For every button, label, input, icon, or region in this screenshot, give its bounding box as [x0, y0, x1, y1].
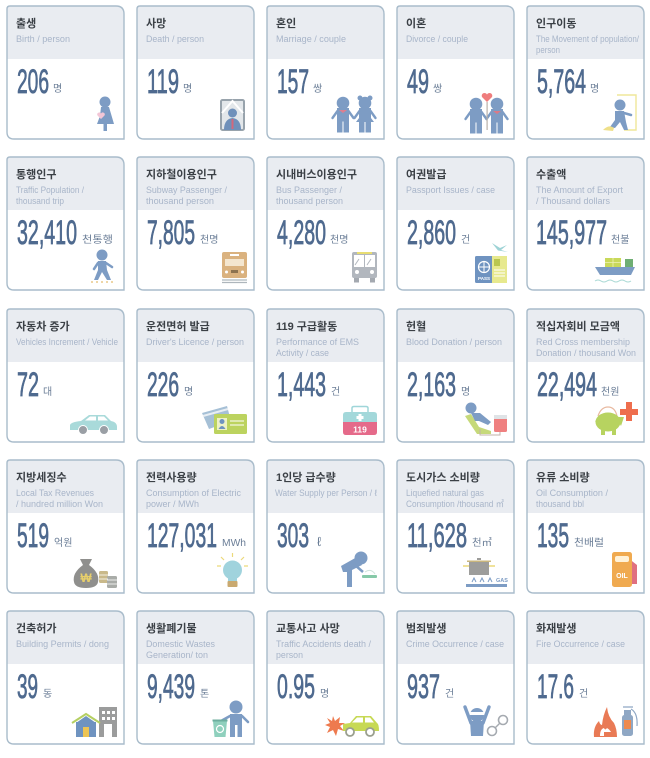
value: 1,443: 건 [331, 386, 340, 398]
heading: population movement [536, 17, 639, 55]
card: bus passenger [267, 157, 384, 290]
icon: donor in chair with blood bag [465, 402, 507, 435]
heading: 119 EMS activity: 119 구급활동 [276, 319, 337, 333]
icon: house and building [72, 707, 117, 737]
icon: passport and plane: PASS [478, 276, 490, 281]
card: traffic population [7, 157, 124, 290]
heading: traffic accidents death: 교통사고 사망 [276, 622, 340, 635]
icon: person running through door [603, 95, 636, 131]
value: 226: 226 [147, 366, 179, 404]
heading: oil consumption [536, 471, 609, 509]
icon: pregnant woman [97, 96, 114, 131]
value: 11,628: 11,628 [407, 517, 467, 555]
icon: subway train [222, 252, 247, 282]
heading: traffic accidents death: Traffic Accidents death / [276, 639, 371, 649]
heading: driver's licence: 운전면허 발급 [146, 320, 210, 333]
heading: consumption of electric power: 전력사용량 [146, 471, 197, 484]
card: electric power [137, 460, 254, 593]
heading: consumption of electric power: power / MWh [146, 499, 199, 509]
card: driver's licence [137, 309, 254, 442]
heading: local tax revenues: Local Tax Revenues [16, 488, 94, 498]
icon: car [70, 415, 117, 434]
heading: subway passenger: 지하철이용인구 [146, 168, 217, 181]
heading: oil consumption: 유류 소비량 [536, 471, 590, 484]
heading: fire occurrence [536, 621, 625, 649]
heading: marriage: 혼인 [276, 17, 296, 30]
icon: car crash [325, 716, 379, 736]
heading: 119 EMS activity: Performance of EMS [276, 337, 359, 347]
icon: couple [332, 96, 376, 132]
heading: red cross membership [536, 319, 636, 358]
value: 72: 대 [43, 386, 52, 398]
icon: walking person [91, 250, 115, 282]
value: 226: 명 [184, 386, 193, 398]
heading: population movement: 인구이동 [536, 17, 576, 30]
heading: traffic population: 통행인구 [16, 167, 56, 181]
card: red cross donation [527, 309, 644, 442]
card: death [137, 6, 254, 139]
heading: local tax revenues [16, 471, 103, 509]
heading: water supply per person: Water Supply per Person / ℓ [275, 488, 378, 498]
heading: oil consumption: Oil Consumption / [536, 488, 609, 498]
value: 2,163: 2,163 [407, 366, 456, 404]
icon: money bag and coins: ₩ [80, 571, 92, 585]
value: 49: 49 [407, 63, 429, 101]
value: 127,031: MWh [222, 538, 246, 549]
heading: liquefied natural gas: Consumption /thousand ㎥ [406, 499, 504, 509]
heading: population movement: person [536, 45, 560, 55]
heading: bus passenger [276, 167, 357, 206]
card: movement of population [527, 6, 644, 139]
value: 157: 쌍 [313, 83, 322, 95]
value: 39: 동 [43, 688, 52, 700]
heading: birth: Birth / person [16, 34, 70, 44]
heading: divorce: Divorce / couple [406, 34, 468, 44]
card: vehicles increment [7, 309, 124, 442]
value: 22,494: 천원 [601, 386, 619, 398]
value: 2,163: 명 [461, 386, 470, 398]
value: 2,860: 건 [461, 234, 470, 246]
heading: death: 사망 [146, 17, 166, 30]
heading: building permits [16, 621, 109, 649]
value: 22,494: 22,494 [537, 366, 597, 404]
heading: death: Death / person [146, 34, 204, 44]
value: 135: 135 [537, 517, 569, 555]
card: blood donation [397, 309, 514, 442]
heading: crime occurrence: 범죄발생 [406, 622, 446, 635]
card: domestic wastes [137, 611, 254, 744]
value: 32,410: 천통행 [82, 234, 113, 246]
heading: vehicles increment: Vehicles Increment / Vehicle [16, 337, 118, 347]
card: fire [527, 611, 644, 744]
heading: local tax revenues: / hundred million Won [16, 499, 103, 509]
card: marriage [267, 6, 384, 139]
heading: subway passenger: thousand person [146, 196, 214, 206]
heading: consumption of electric power: Consumption of Electric [146, 488, 241, 498]
icon: flames and extinguisher [594, 707, 637, 737]
heading: bus passenger: 시내버스이용인구 [276, 167, 357, 181]
icon: bus [352, 252, 377, 282]
value: 937: 937 [407, 668, 440, 706]
value: 119: 명 [183, 83, 192, 95]
value: 32,410: 32,410 [17, 214, 77, 252]
heading: blood donation [406, 319, 502, 347]
value: 145,977: 천불 [611, 234, 629, 246]
heading: traffic population: thousand trip [16, 196, 64, 206]
card: birth [7, 6, 124, 139]
heading: bus passenger: Bus Passenger / [276, 185, 342, 195]
heading: domestic wastes: 생활폐기물 [146, 621, 197, 635]
heading: domestic wastes: Generation/ ton [146, 650, 208, 660]
value: 206: 206 [17, 63, 49, 101]
icon: piggy bank and cross [595, 402, 638, 435]
heading: marriage: Marriage / couple [276, 34, 346, 44]
card: subway passenger [137, 157, 254, 290]
value: 0.95: 명 [320, 688, 329, 700]
card: oil [527, 460, 644, 593]
heading: fire occurrence: 화재발생 [536, 621, 576, 635]
heading: traffic accidents death [276, 622, 371, 660]
heading: water supply per person: 1인당 급수량 [276, 471, 336, 484]
card: traffic accidents [267, 611, 384, 744]
value: 72: 72 [17, 366, 39, 404]
value: 7,805: 천명 [200, 234, 218, 246]
heading: amount of export [536, 168, 623, 206]
heading: building permits: 건축허가 [16, 621, 56, 635]
heading: domestic wastes: Domestic Wastes [146, 639, 215, 649]
value: 9,439: 9,439 [147, 668, 195, 706]
value: 127,031: 127,031 [147, 517, 217, 555]
value: 49: 쌍 [433, 83, 442, 95]
heading: red cross membership: Red Cross membership [536, 337, 630, 347]
heading: fire occurrence: Fire Occurrence / case [536, 639, 625, 649]
value: 17.6: 17.6 [537, 668, 574, 706]
value: 519: 519 [17, 517, 49, 555]
card: passport issues [397, 157, 514, 290]
heading: passport issues [406, 167, 495, 195]
card: crime [397, 611, 514, 744]
heading: subway passenger: Subway Passenger / [146, 185, 227, 195]
icon: divorcing couple with broken heart [466, 93, 508, 133]
value: 135: 천배럴 [574, 536, 604, 549]
value: 303: ℓ [317, 534, 322, 549]
icon: thief and handcuffs [465, 707, 508, 736]
heading: birth: 출생 [16, 17, 36, 30]
card: water supply [267, 460, 384, 593]
heading: amount of export: / Thousand dollars [536, 196, 610, 206]
icon: licence cards [202, 406, 247, 434]
heading: population movement: The Movement of population/ [536, 34, 639, 44]
heading: crime occurrence [406, 622, 504, 649]
icon: person with recycling bin [212, 700, 248, 737]
card: divorce [397, 6, 514, 139]
heading: vehicles increment [16, 319, 118, 347]
heading: red cross membership: Donation / thousand Won [536, 348, 636, 358]
heading: blood donation: 헌혈 [406, 319, 426, 333]
heading: traffic population [16, 167, 84, 206]
icon: person washing [341, 552, 377, 587]
heading: driver's licence: Driver's Licence / person [146, 337, 244, 347]
value: 119: 119 [147, 63, 179, 101]
card: export amount [527, 157, 644, 290]
value: 39: 39 [17, 668, 38, 706]
heading: traffic accidents death: person [276, 650, 303, 660]
heading: water supply per person [275, 471, 378, 498]
heading: liquefied natural gas: 도시가스 소비량 [406, 470, 480, 484]
heading: oil consumption: thousand bbl [536, 499, 584, 509]
heading: vehicles increment: 자동차 증가 [16, 319, 70, 333]
heading: passport issues: 여권발급 [406, 167, 446, 181]
heading: red cross membership: 적십자회비 모금액 [536, 319, 620, 333]
heading: blood donation: Blood Donation / person [406, 337, 502, 347]
value: 303: 303 [277, 517, 309, 555]
icon: first aid kit: 119 [353, 424, 367, 434]
value: 206: 명 [53, 83, 62, 95]
heading: liquefied natural gas [406, 470, 504, 509]
heading: 119 EMS activity: Activity / case [276, 348, 329, 358]
heading: 119 EMS activity [276, 319, 359, 358]
icon: gas stove and pot: GAS [496, 578, 508, 584]
value: 4,280: 4,280 [277, 214, 326, 252]
heading: domestic wastes [146, 621, 215, 660]
heading: building permits: Building Permits / dong [16, 639, 109, 649]
value: 0.95: 0.95 [277, 668, 315, 706]
heading: death [146, 17, 204, 44]
icon: fuel pump: OIL [616, 573, 629, 580]
value: 5,764: 명 [590, 83, 599, 95]
value: 157: 157 [277, 63, 309, 101]
value: 11,628: 천㎥ [472, 536, 492, 549]
heading: marriage [276, 17, 346, 44]
heading: subway passenger [146, 168, 227, 206]
heading: passport issues: Passport Issues / case [406, 185, 495, 195]
heading: divorce: 이혼 [406, 17, 426, 30]
heading: bus passenger: thousand person [276, 196, 343, 206]
card: building permits [7, 611, 124, 744]
heading: local tax revenues: 지방세징수 [16, 471, 67, 484]
icon: cargo ship [595, 258, 635, 282]
heading: consumption of electric power [146, 471, 241, 509]
card: 119 EMS [267, 309, 384, 442]
value: 2,860: 2,860 [407, 214, 456, 252]
value: 4,280: 천명 [330, 234, 348, 246]
value: 9,439: 톤 [200, 688, 209, 700]
value: 5,764: 5,764 [537, 63, 586, 101]
heading: driver's licence [146, 320, 244, 347]
heading: crime occurrence: Crime Occurrence / case [406, 639, 504, 649]
heading: amount of export: 수출액 [536, 168, 566, 181]
heading: traffic population: Traffic Population / [16, 185, 84, 195]
icon: light bulb [217, 553, 248, 587]
value: 7,805: 7,805 [147, 214, 195, 252]
value: 17.6: 건 [579, 688, 588, 700]
heading: birth [16, 17, 70, 44]
value: 937: 건 [445, 688, 454, 700]
card: local tax revenues [7, 460, 124, 593]
value: 1,443: 1,443 [277, 366, 326, 404]
heading: liquefied natural gas: Liquefied natural gas [406, 488, 484, 498]
heading: divorce [406, 17, 468, 44]
value: 519: 억원 [54, 537, 72, 549]
heading: amount of export: The Amount of Export [536, 185, 623, 195]
icon: funeral portrait [221, 100, 244, 130]
card: city gas [397, 460, 514, 593]
